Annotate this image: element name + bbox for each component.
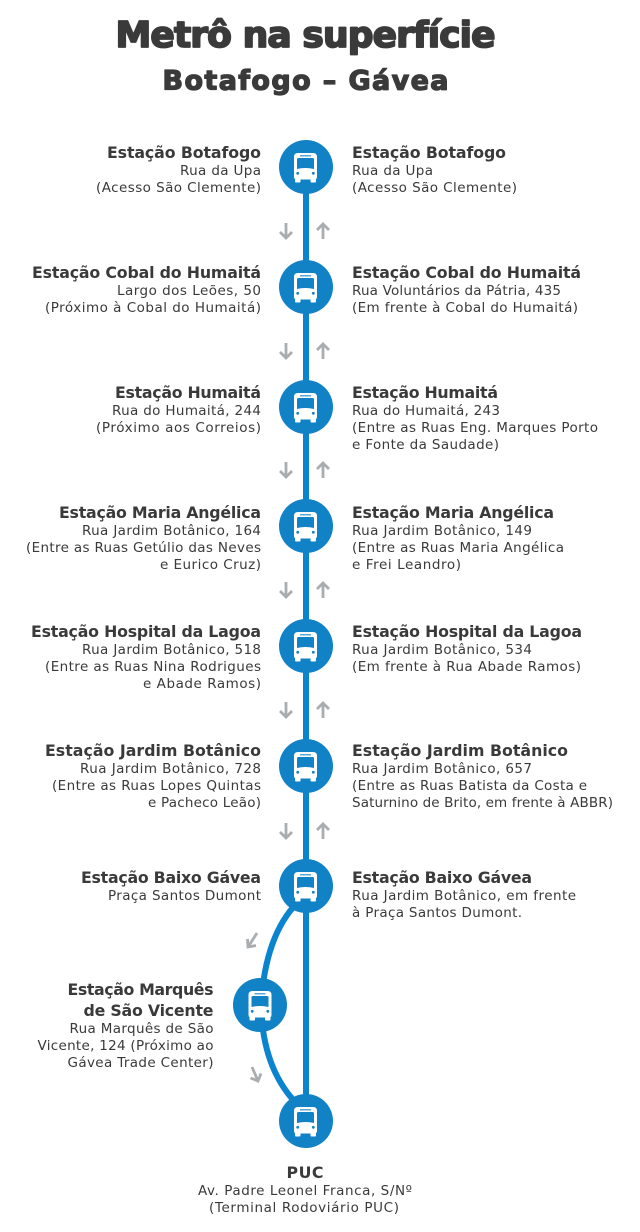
stop: PUC xyxy=(279,1094,333,1148)
right label: Estação Cobal do Humaitá xyxy=(352,263,581,316)
left label: Estação Hospital da Lagoa: Rua Jardim Botânico, 518 xyxy=(82,642,261,658)
left label: Estação Cobal do Humaitá: Estação Cobal do Humaitá xyxy=(32,263,261,282)
right label: Estação Botafogo xyxy=(352,143,517,196)
left label: Estação Maria Angélica: Estação Maria Angélica xyxy=(59,503,261,522)
left label: Estação Maria Angélica: (Entre as Ruas Getúlio das Neves xyxy=(26,540,261,556)
left label: Estação Jardim Botânico: e Pacheco Leão) xyxy=(148,795,261,811)
label: PUC: Av. Padre Leonel Franca, S/Nº xyxy=(198,1183,412,1199)
right label: Estação Baixo Gávea: Rua Jardim Botânico, em frente xyxy=(352,888,576,904)
right label: Estação Cobal do Humaitá: Estação Cobal do Humaitá xyxy=(352,263,581,282)
left label: Estação Hospital da Lagoa: Estação Hospital da Lagoa xyxy=(31,622,261,641)
right label: Estação Jardim Botânico: (Entre as Ruas Batista da Costa e xyxy=(352,778,587,794)
right label: Estação Cobal do Humaitá: Rua Voluntários da Pátria, 435 xyxy=(352,283,561,299)
right label: Estação Jardim Botânico: Rua Jardim Botânico, 657 xyxy=(352,761,532,777)
stop: Cobal do Humaitá xyxy=(279,260,333,314)
stop: Maria Angélica xyxy=(279,499,333,553)
left label: Estação Hospital da Lagoa: (Entre as Ruas Nina Rodrigues xyxy=(45,659,261,675)
left label: Estação Hospital da Lagoa: e Abade Ramos) xyxy=(143,676,261,692)
right label: Estação Botafogo: Rua da Upa xyxy=(352,163,433,179)
right label: Estação Baixo Gávea xyxy=(352,868,576,921)
left label: Estação Jardim Botânico: Estação Jardim Botânico xyxy=(45,741,261,760)
left label: Estação Botafogo: Estação Botafogo xyxy=(107,143,261,162)
label: PUC: (Terminal Rodoviário PUC) xyxy=(209,1200,399,1216)
right label: Estação Maria Angélica xyxy=(352,503,564,573)
stop: Marquês de São Vicente xyxy=(233,978,287,1032)
right label: Estação Humaitá: (Entre as Ruas Eng. Marques Porto xyxy=(352,420,598,436)
left label: Estação Baixo Gávea xyxy=(81,868,261,904)
left label: Estação Botafogo: (Acesso São Clemente) xyxy=(96,180,261,196)
label: PUC xyxy=(198,1163,412,1216)
right label: Estação Hospital da Lagoa: Rua Jardim Botânico, 534 xyxy=(352,642,532,658)
label: Estação Marquês de São Vicente: Rua Marquês de São xyxy=(70,1021,214,1037)
left label: Estação Cobal do Humaitá xyxy=(32,263,261,316)
left label: Estação Botafogo: Rua da Upa xyxy=(180,163,261,179)
right label: Estação Jardim Botânico: Estação Jardim Botânico xyxy=(352,741,568,760)
right label: Estação Maria Angélica: e Frei Leandro) xyxy=(352,557,461,573)
subtitle: Botafogo – Gávea xyxy=(162,66,448,96)
right label: Estação Botafogo: Estação Botafogo xyxy=(352,143,506,162)
left label: Estação Humaitá: (Próximo aos Correios) xyxy=(96,420,261,436)
right label: Estação Humaitá xyxy=(352,383,598,453)
right label: Estação Hospital da Lagoa: (Em frente à Rua Abade Ramos) xyxy=(352,659,581,675)
left label: Estação Jardim Botânico: (Entre as Ruas Lopes Quintas xyxy=(52,778,261,794)
stop: Jardim Botânico xyxy=(279,739,333,793)
label: Estação Marquês de São Vicente: de São Vicente xyxy=(84,1001,214,1020)
left label: Estação Maria Angélica: e Eurico Cruz) xyxy=(160,557,261,573)
right label: Estação Maria Angélica: Estação Maria Angélica xyxy=(352,503,554,522)
right label: Estação Humaitá: e Fonte da Saudade) xyxy=(352,437,499,453)
right label: Estação Baixo Gávea: Estação Baixo Gávea xyxy=(352,868,532,887)
left label: Estação Cobal do Humaitá: Largo dos Leões, 50 xyxy=(117,283,261,299)
left label: Estação Baixo Gávea: Estação Baixo Gávea xyxy=(81,868,261,887)
left label: Estação Humaitá xyxy=(96,383,261,436)
label: Estação Marquês de São Vicente: Gávea Trade Center) xyxy=(68,1055,214,1071)
right label: Estação Hospital da Lagoa: Estação Hospital da Lagoa xyxy=(352,622,582,641)
right label: Estação Baixo Gávea: à Praça Santos Dumont. xyxy=(352,905,522,921)
right label: Estação Jardim Botânico: Saturnino de Brito, em frente à ABBR) xyxy=(352,795,613,811)
left label: Estação Hospital da Lagoa xyxy=(31,622,261,692)
direction arrows xyxy=(248,223,329,1081)
stop: Baixo Gávea xyxy=(279,859,333,913)
right label: Estação Humaitá: Rua do Humaitá, 243 xyxy=(352,403,500,419)
left label: Estação Jardim Botânico xyxy=(45,741,261,811)
left label: Estação Cobal do Humaitá: (Próximo à Cobal do Humaitá) xyxy=(45,300,261,316)
route line: main trunk and branch xyxy=(261,167,306,1121)
right label: Estação Botafogo: (Acesso São Clemente) xyxy=(352,180,517,196)
stop: Humaitá xyxy=(279,380,333,434)
left label: Estação Humaitá: Rua do Humaitá, 244 xyxy=(112,403,261,419)
label: Estação Marquês de São Vicente: Estação Marquês xyxy=(68,980,214,999)
stop: Botafogo xyxy=(279,140,333,194)
title: Metrô na superfície xyxy=(116,15,496,56)
left label: Estação Maria Angélica xyxy=(26,503,261,573)
right label: Estação Hospital da Lagoa xyxy=(352,622,582,675)
left label: Estação Baixo Gávea: Praça Santos Dumont xyxy=(108,888,261,904)
left label: Estação Botafogo xyxy=(96,143,261,196)
right label: Estação Cobal do Humaitá: (Em frente à Cobal do Humaitá) xyxy=(352,300,578,316)
right label: Estação Jardim Botânico xyxy=(352,741,613,811)
right label: Estação Humaitá: Estação Humaitá xyxy=(352,383,498,402)
left label: Estação Humaitá: Estação Humaitá xyxy=(115,383,261,402)
stop: Hospital da Lagoa xyxy=(279,619,333,673)
right label: Estação Maria Angélica: (Entre as Ruas Maria Angélica xyxy=(352,540,564,556)
label: Estação Marquês de São Vicente xyxy=(38,980,214,1071)
label: Estação Marquês de São Vicente: Vicente, 124 (Próximo ao xyxy=(38,1038,214,1054)
left label: Estação Jardim Botânico: Rua Jardim Botânico, 728 xyxy=(80,761,261,777)
left label: Estação Maria Angélica: Rua Jardim Botânico, 164 xyxy=(82,523,261,539)
label: PUC: PUC xyxy=(286,1163,324,1182)
right label: Estação Maria Angélica: Rua Jardim Botânico, 149 xyxy=(352,523,532,539)
